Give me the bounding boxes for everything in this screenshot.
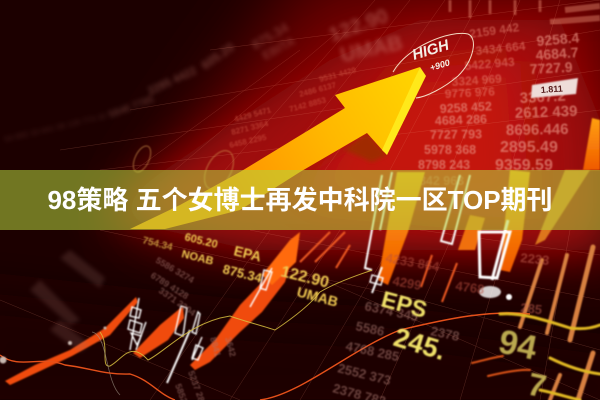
icon: big yellow up arrow	[130, 67, 426, 229]
number columns: 3434 664	[475, 39, 526, 58]
oval: HIGH +900: +900	[429, 57, 451, 73]
main number columns: 2895.49	[500, 139, 558, 156]
yellow EPS and value labels: 245.	[390, 322, 449, 366]
title: 98策略 五个女博士再发中科院一区TOP期刊	[47, 185, 553, 215]
lower red number rows: 6374 345	[363, 298, 420, 324]
faint data numbers upper area: 2285 4422	[146, 65, 198, 98]
white glow cluster	[479, 286, 501, 298]
small red number grid: 2486 6137	[298, 80, 338, 99]
main number columns: 8798 243	[418, 158, 470, 172]
grey line	[92, 332, 120, 395]
main number columns: 7842 963	[412, 174, 464, 188]
lower red number rows: 285	[520, 300, 543, 317]
lower orange candlesticks	[300, 170, 593, 400]
faint data numbers upper area	[3, 5, 405, 144]
faint data numbers upper area: 605.20	[199, 40, 237, 72]
small red number grid: 8271 3364	[230, 119, 270, 137]
lower red number rows: 4233 864	[384, 250, 441, 275]
faint data numbers upper area: UMAB	[338, 31, 405, 67]
lower red number rows: 5586	[354, 318, 386, 339]
number columns: 9776 976	[444, 84, 495, 101]
small red number grid: 4429 5471	[233, 105, 273, 124]
lower orange rising bars	[5, 232, 300, 385]
yellow tickers lower: 875.34	[221, 261, 264, 286]
main number columns: 9258 452	[439, 99, 492, 116]
panel: dark lower floor	[0, 290, 600, 400]
small red number grid: 6458 2295	[228, 133, 268, 150]
main number columns: 2612 439	[515, 103, 578, 122]
main number columns: 7727 793	[430, 127, 482, 142]
panel: red glow upper right	[100, 0, 600, 250]
yellow tickers lower: UMAB	[295, 283, 340, 310]
white ticker highlight: 1.811	[540, 83, 563, 95]
faint data numbers upper area: 875.34	[249, 19, 292, 53]
lower red number rows	[149, 250, 550, 400]
lower red number rows: 5586 3274	[154, 255, 196, 285]
title band	[0, 170, 600, 230]
small red number grid: 9531 4420	[318, 65, 358, 84]
number columns	[444, 20, 526, 101]
main number columns: 3367.2	[519, 88, 566, 107]
small red number grid: 7142 8853	[288, 95, 328, 114]
number columns: 5422 943	[464, 55, 515, 73]
main number columns: 4684 286	[435, 112, 487, 128]
white ticker highlight	[531, 78, 578, 98]
main number columns: 9359.59	[495, 157, 553, 174]
yellow EPS and value labels: EPS	[379, 286, 430, 323]
main number columns: 7727.9	[529, 59, 573, 77]
faint data numbers upper area: 122.90	[326, 5, 391, 47]
oval: HIGH +900: HIGH	[410, 36, 452, 64]
orange curve line	[0, 313, 530, 400]
white candlesticks left	[128, 268, 272, 383]
lower red number rows: 3642	[223, 336, 238, 358]
lower red number rows: 4768	[455, 278, 485, 297]
lower red number rows: 8841	[208, 336, 223, 358]
yellow moving average line	[100, 270, 372, 366]
faint data numbers upper area: EBITA	[260, 34, 298, 63]
main number columns: 5978 368	[424, 143, 476, 157]
lower red number rows: 2552 373	[336, 360, 393, 388]
small red number grid	[228, 65, 358, 150]
yellow tickers lower: NOAB	[180, 248, 215, 268]
yellow tickers lower: 122.90	[279, 263, 331, 292]
yellow EPS and value labels: 94	[495, 323, 540, 368]
faint left data streaks	[30, 250, 105, 352]
number columns: 2159 442	[468, 20, 520, 41]
yellow tickers lower: EPA	[232, 242, 263, 265]
yellow tickers lower	[141, 231, 340, 310]
lower red number rows: 4299	[391, 273, 423, 293]
lower red number rows: 2378	[429, 323, 461, 344]
main number columns: 8696.446	[506, 121, 569, 139]
yellow tickers lower: 754.34	[141, 235, 174, 253]
yellow wave lines right	[472, 314, 600, 400]
main number columns: 9258.4	[536, 29, 580, 49]
lower red number rows: 6789 4128	[149, 270, 190, 301]
white candlesticks right	[365, 172, 510, 293]
faint data numbers upper area: 54 892 33 641 58 129 774 30	[3, 112, 108, 144]
yellow EPS and value labels	[379, 286, 549, 400]
lower red number rows: 4768 285	[344, 338, 401, 364]
number columns: 3324 969	[451, 72, 502, 89]
main number columns	[412, 29, 580, 188]
lower red number rows: 3371 2204	[157, 285, 197, 318]
yellow tickers lower: 605.20	[183, 231, 219, 251]
right edge orange bar top	[583, 118, 600, 170]
faint data numbers upper area: 5846 7785	[107, 94, 156, 121]
top candle hints	[450, 0, 600, 22]
lower red number rows: 2233	[520, 250, 550, 268]
oval: HIGH +900	[393, 33, 473, 98]
main number columns: 4684.7	[535, 44, 579, 63]
left bright dots	[0, 326, 106, 364]
small rings left of arrow	[130, 143, 239, 194]
